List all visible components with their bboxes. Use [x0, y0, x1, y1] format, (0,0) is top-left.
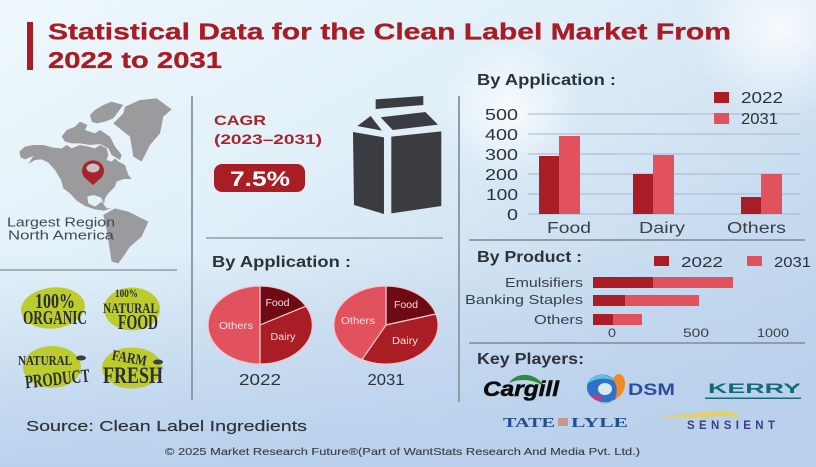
- logo: Tate & Lyle: [503, 416, 628, 431]
- logo: Sensient: SENSIENT: [687, 420, 775, 432]
- bar chart: by application: Dairy: [639, 220, 685, 237]
- bar chart: by application: 300: [485, 147, 518, 164]
- title: 2022 to 2031: [48, 47, 222, 73]
- legend: [654, 254, 811, 271]
- stacked bar chart: by product: Others: [534, 312, 584, 327]
- stacked bar chart: by product: Emulsifiers: [505, 275, 584, 290]
- badge: 100% organic: ORGANIC: [23, 307, 87, 329]
- legend: 2022: [681, 254, 723, 271]
- region label: [7, 214, 115, 242]
- CAGR value badge: 7.5%: [230, 168, 290, 191]
- organic badges: [18, 284, 163, 393]
- badge: farm fresh: FARM: [111, 348, 148, 370]
- bar chart: by application: 500: [485, 107, 518, 124]
- heading: by application pies: By Application :: [212, 254, 351, 271]
- stacked bar chart: by product: [465, 254, 811, 340]
- pie chart 2022: Others: [219, 321, 253, 332]
- badge: farm fresh: [102, 348, 163, 388]
- badge: 100% natural food: [103, 286, 160, 334]
- legend: [714, 90, 783, 128]
- logo: Sensient: [653, 411, 775, 432]
- pie chart 2022: Dairy: [270, 332, 296, 343]
- logo: Tate & Lyle: LYLE: [571, 416, 628, 431]
- bar chart: by application: 0: [507, 207, 518, 224]
- logo: Kerry: KERRY: [708, 381, 801, 396]
- CAGR block: (2023–2031): [214, 131, 322, 147]
- heading: by application bars: By Application :: [477, 72, 616, 89]
- region label: North America: [8, 228, 115, 242]
- pie chart 2031: Dairy: [392, 336, 418, 347]
- badge: 100% natural food: 100%: [115, 286, 138, 300]
- bar chart: by application: [485, 90, 800, 237]
- logo: Cargill: Cargill: [483, 378, 560, 401]
- bar chart: by application: 200: [485, 167, 518, 184]
- pie chart 2031: [334, 286, 438, 364]
- legend: 2031: [741, 111, 778, 128]
- badge: natural product: [18, 346, 91, 393]
- badge: natural product: PRODUCT: [24, 366, 91, 393]
- stacked bar chart: by product: 0: [608, 326, 616, 340]
- copyright: © 2025 Market Research Future®(Part of WantStats Research And Media Pvt. Ltd.): [165, 446, 640, 458]
- badge: natural product: NATURAL: [18, 354, 72, 369]
- logo: DSM: [587, 374, 675, 403]
- pie chart 2022: [208, 286, 312, 364]
- stacked bar chart: by product: 1000: [757, 326, 789, 340]
- bar chart: by application: Others: [727, 220, 786, 237]
- region label: Largest Region: [7, 214, 115, 230]
- logo: DSM: DSM: [628, 380, 675, 399]
- title: Statistical Data for the Clean Label Market From: [48, 18, 731, 44]
- logo: Tate & Lyle: TATE: [503, 416, 555, 431]
- badge: 100% organic: 100%: [35, 289, 75, 313]
- map: largest region North America: [7, 98, 172, 263]
- logo: Kerry: [705, 381, 801, 399]
- label 2031: 2031: [368, 372, 404, 389]
- label 2022: 2022: [239, 372, 281, 389]
- bar chart: by application: 400: [485, 127, 518, 144]
- legend: 2031: [774, 254, 811, 271]
- badge: 100% organic: [19, 284, 87, 332]
- icon: location pin: [82, 160, 104, 185]
- pie chart 2022: Food: [266, 298, 290, 309]
- bar chart: by application: 100: [486, 187, 518, 204]
- source: Source: Clean Label Ingredients: [26, 418, 307, 435]
- heading: by product: By Product :: [477, 249, 582, 266]
- stacked bar chart: by product: 500: [683, 326, 709, 340]
- badge: farm fresh: FRESH: [103, 363, 163, 388]
- heading: key players: Key Players:: [477, 351, 584, 368]
- badge: 100% natural food: FOOD: [118, 310, 158, 334]
- bar chart: by application: Food: [547, 220, 591, 237]
- pie chart 2031: Others: [341, 316, 375, 327]
- stacked bar chart: by product: Banking Staples: [465, 292, 584, 307]
- CAGR block: CAGR: [214, 113, 266, 128]
- CAGR block: [214, 113, 322, 192]
- badge: 100% natural food: NATURAL: [103, 301, 158, 317]
- icon: milk carton: [353, 96, 441, 214]
- pie chart 2031: Food: [394, 300, 418, 311]
- title: [27, 18, 731, 73]
- legend: 2022: [741, 90, 783, 107]
